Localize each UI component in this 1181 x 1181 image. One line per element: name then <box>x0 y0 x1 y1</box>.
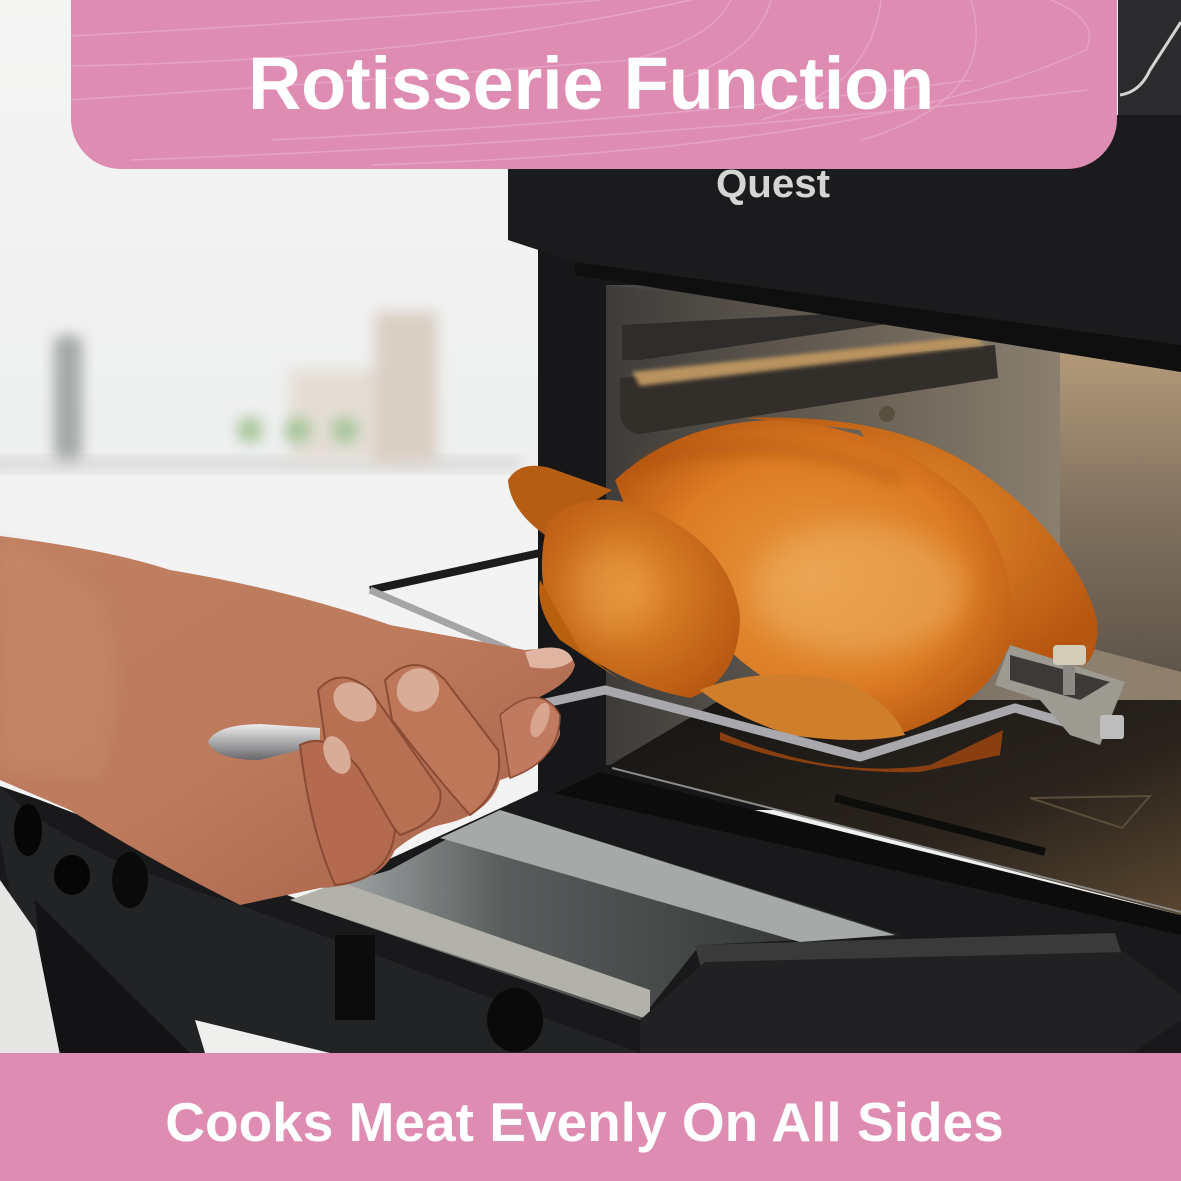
tagline: Cooks Meat Evenly On All Sides <box>165 1091 1004 1153</box>
heading: Rotisserie Function <box>248 42 934 125</box>
top banner: heading <box>71 0 1117 169</box>
roast chicken <box>508 417 1098 772</box>
banner contour pattern <box>71 0 1090 166</box>
bottom banner: tagline <box>0 1053 1181 1181</box>
rotisserie fork and clamp <box>370 553 1125 757</box>
brand logo: Quest <box>716 162 830 206</box>
steel handle grip <box>208 724 320 760</box>
air fryer oven body <box>508 0 1181 950</box>
hand gripping the handle <box>0 536 575 905</box>
open oven door with glass <box>0 786 1181 1055</box>
